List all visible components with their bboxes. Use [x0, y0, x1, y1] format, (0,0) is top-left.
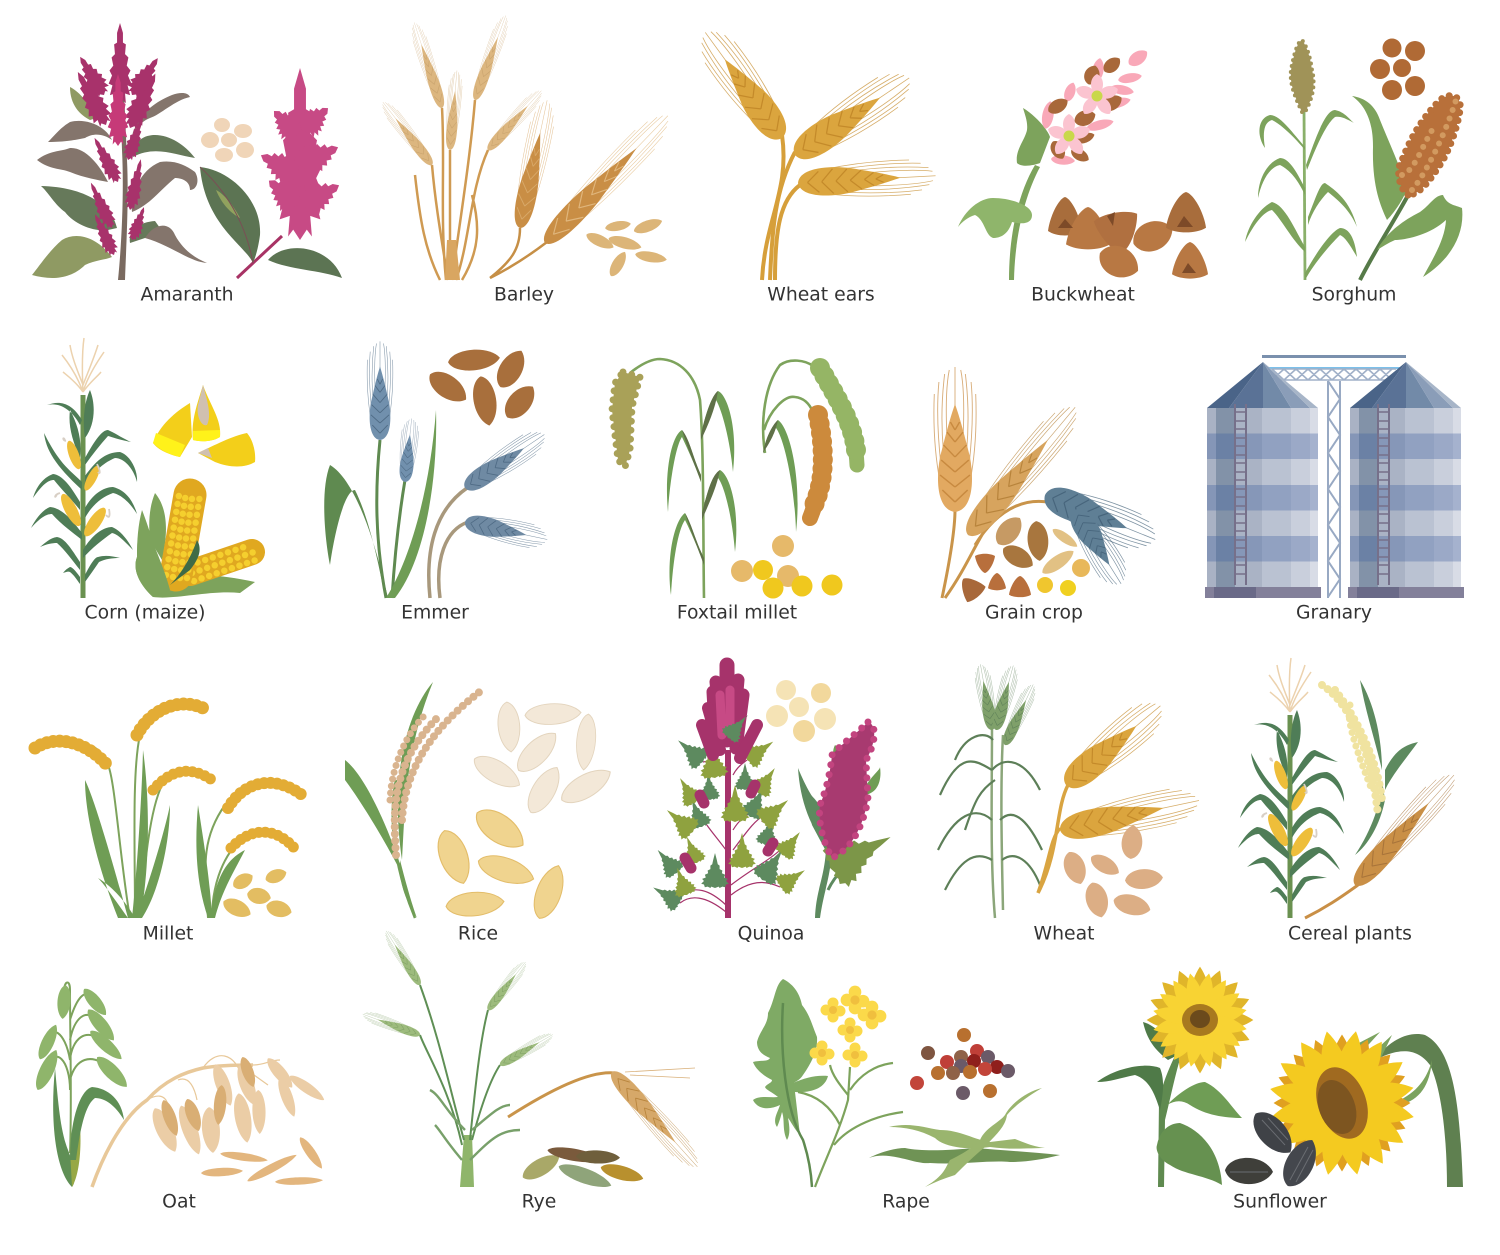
rye ear — [508, 1065, 705, 1174]
label: Rye: Rye — [522, 1192, 556, 1212]
barley ears — [490, 98, 678, 278]
plant: buckwheat stem and leaves — [958, 108, 1050, 280]
rape pods — [869, 1088, 1060, 1187]
barley grains — [584, 216, 668, 279]
label: Foxtail millet: Foxtail millet — [677, 602, 797, 624]
flower spike and leaves — [200, 68, 347, 278]
panel: grain crop — [934, 367, 1162, 624]
panel: buckwheat — [958, 46, 1208, 305]
foxtail panicles — [612, 368, 857, 518]
panel: rye — [361, 928, 705, 1212]
panel: corn — [31, 338, 256, 624]
white rice grains — [469, 701, 616, 818]
wheat stems — [762, 135, 800, 280]
label: Wheat: Wheat — [1034, 924, 1094, 944]
label: Sorghum: Sorghum — [1312, 284, 1396, 306]
panel: rice — [345, 682, 616, 944]
label: Rice: Rice — [458, 924, 498, 944]
amaranth seeds — [201, 118, 254, 162]
sorghum seeds — [1370, 38, 1425, 100]
panel: barley — [378, 13, 678, 305]
quinoa seeds — [766, 680, 836, 742]
panel: rape — [753, 979, 1060, 1212]
golden wheat ears — [1038, 692, 1203, 893]
plant: sunflower right — [1256, 1017, 1463, 1189]
blue ears — [429, 425, 551, 598]
label: Corn (maize): Corn (maize) — [85, 602, 205, 624]
panel: emmer — [324, 341, 551, 624]
emmer seeds — [424, 345, 541, 428]
plant: quinoa right — [798, 722, 902, 918]
plant: corn — [31, 338, 137, 598]
plant: amaranth with leaves — [32, 23, 207, 280]
plant: emmer — [324, 341, 436, 598]
wheat seeds — [1059, 824, 1164, 920]
plant: rape leaf — [753, 979, 903, 1187]
label: Amaranth: Amaranth — [140, 284, 234, 306]
rape seeds — [910, 1028, 1015, 1100]
plant: green oat — [31, 982, 132, 1187]
label: Emmer: Emmer — [401, 602, 469, 624]
corn kernels — [153, 385, 255, 466]
label: Cereal plants: Cereal plants — [1288, 924, 1412, 944]
buckwheat seeds — [1048, 192, 1208, 284]
right silo — [1348, 362, 1464, 598]
foxtail seeds — [731, 535, 842, 598]
plant: rice — [345, 682, 482, 918]
corn cobs with husk — [135, 492, 256, 598]
sunflower seeds — [1225, 1105, 1324, 1192]
plant: barley stalks — [378, 13, 546, 280]
label: Quinoa: Quinoa — [738, 924, 804, 944]
plant: foxtail stems — [630, 359, 813, 598]
panel: foxtail millet — [612, 359, 857, 624]
millet seeds — [220, 866, 294, 922]
label: Oat: Oat — [162, 1192, 196, 1212]
plant: corn — [1238, 658, 1344, 918]
label: Sunflower: Sunflower — [1233, 1192, 1327, 1212]
label: Rape: Rape — [882, 1192, 930, 1212]
rye seeds — [519, 1144, 645, 1193]
conveyor truss and tower — [1262, 355, 1406, 598]
plant: rye green — [361, 928, 555, 1187]
label: Grain crop: Grain crop — [985, 602, 1083, 624]
panel: wheat — [938, 663, 1203, 944]
panel: cereal plants — [1238, 658, 1464, 944]
oat grains — [201, 1135, 326, 1186]
plant: rice panicle — [1322, 680, 1418, 855]
golden rice grains — [432, 802, 570, 922]
left silo — [1205, 362, 1321, 598]
label: Granary: Granary — [1296, 602, 1372, 624]
wheat ear — [1305, 766, 1464, 918]
label: Barley: Barley — [494, 284, 554, 306]
label: Buckwheat: Buckwheat — [1031, 284, 1135, 306]
panel: wheat ears — [690, 22, 936, 306]
panel: quinoa — [647, 665, 902, 944]
plant: brown sorghum — [1352, 96, 1462, 280]
rape flowers — [810, 986, 886, 1068]
label: Millet: Millet — [143, 924, 193, 944]
mixed seeds — [954, 511, 1090, 604]
panel: granary — [1205, 355, 1464, 624]
label: Wheat ears: Wheat ears — [767, 284, 875, 306]
panel: sorghum — [1245, 38, 1462, 306]
panel: sunflower — [1097, 964, 1463, 1212]
plant: sunflower left — [1097, 964, 1256, 1187]
flower cluster — [1040, 46, 1151, 166]
panel: millet — [35, 704, 302, 944]
plant: green wheat — [938, 663, 1042, 918]
wheat heads — [690, 22, 936, 200]
plant: millet — [35, 704, 302, 918]
panel: oat — [31, 982, 327, 1212]
panel: amaranth — [32, 23, 347, 306]
ears of grain — [934, 367, 1162, 598]
plant: quinoa — [647, 665, 811, 918]
plant: sorghum green — [1245, 40, 1357, 280]
plant: ripe oat — [92, 1055, 327, 1187]
